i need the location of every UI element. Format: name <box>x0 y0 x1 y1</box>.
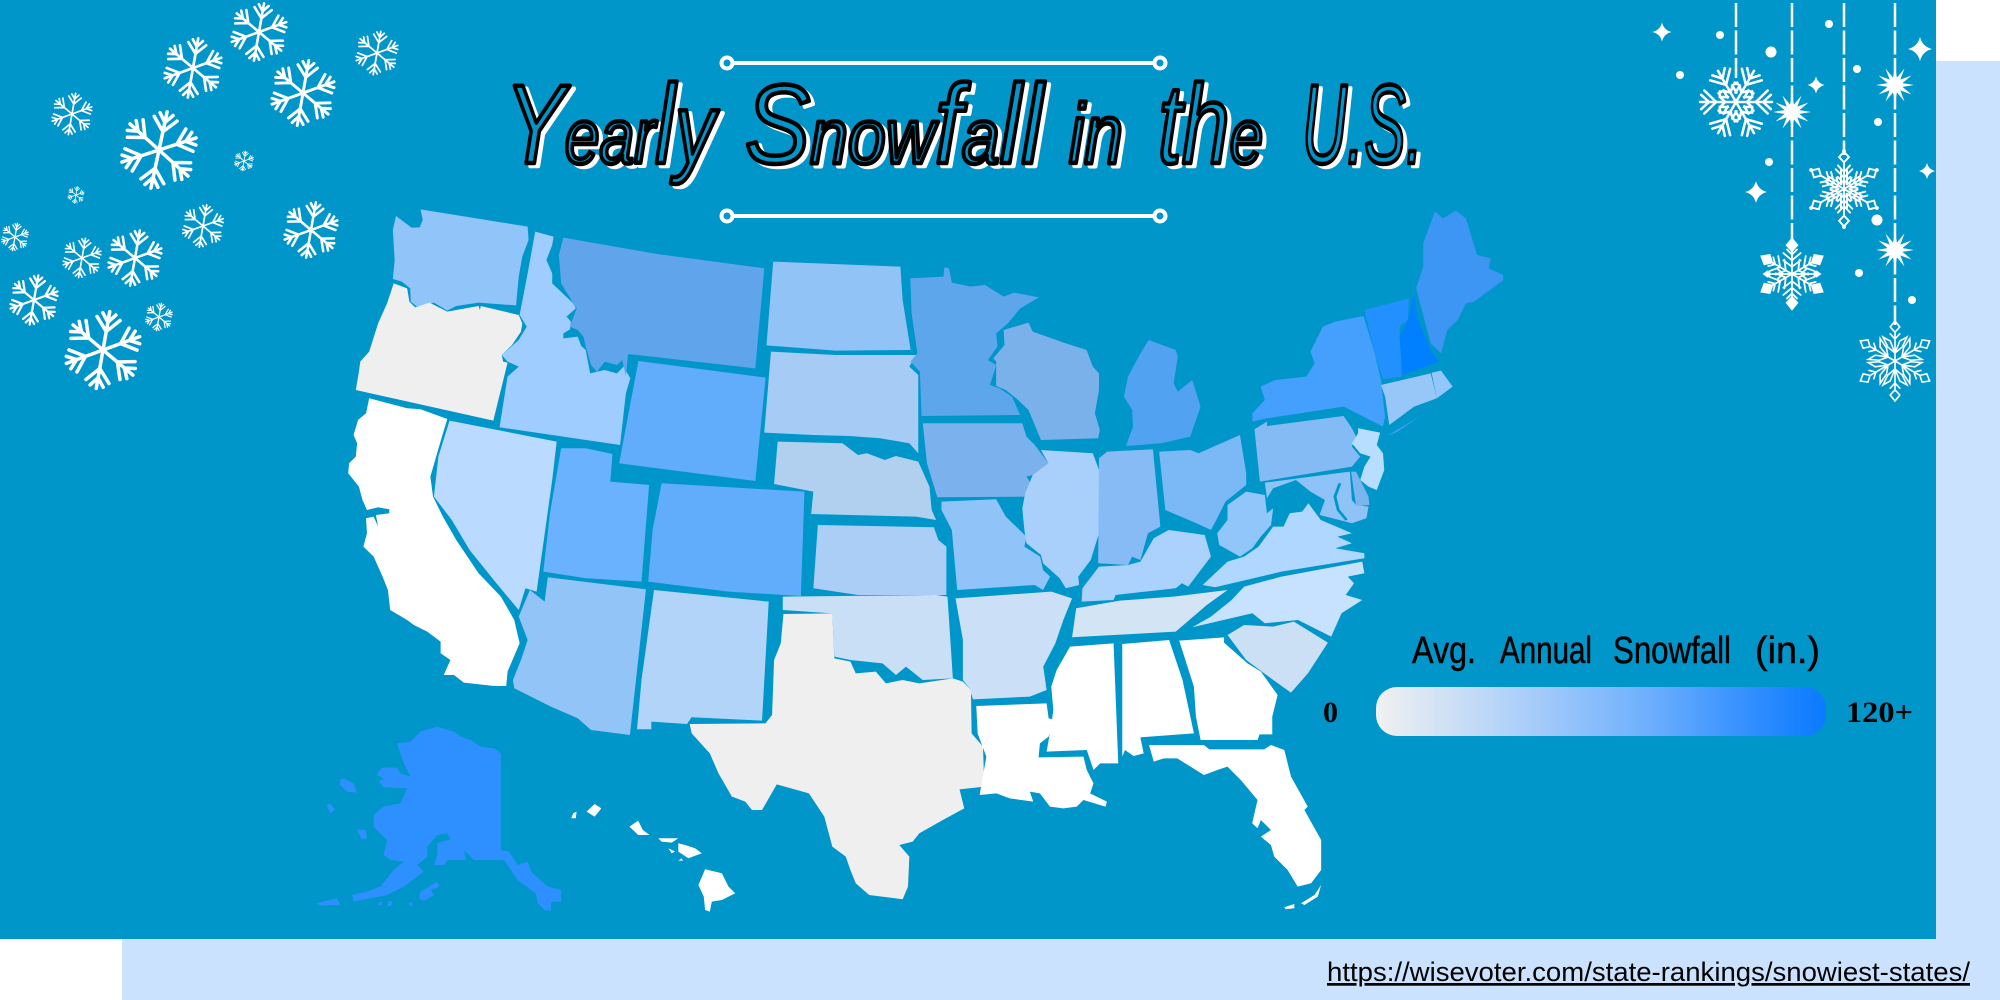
Nevada <box>434 421 557 610</box>
hanging ornaments: starbursts <box>1773 66 1914 269</box>
Wisconsin <box>993 323 1100 440</box>
hanging ornaments: snowflakes <box>1686 52 1936 401</box>
legend minimum label: 0 <box>1323 696 1338 729</box>
Alaska <box>317 727 561 911</box>
Chesapeake Bay <box>1335 483 1347 520</box>
New York <box>1252 316 1420 436</box>
New Hampshire <box>1400 294 1439 375</box>
source link: https://wisevoter.com/state-rankings/snowiest-states/ <box>1327 957 1970 987</box>
Tennessee <box>1072 590 1228 637</box>
West Virginia <box>1217 492 1273 557</box>
map: central and eastern states <box>910 211 1503 693</box>
Maine <box>1416 211 1503 353</box>
Vermont <box>1364 298 1409 379</box>
title: U.S. <box>1302 62 1423 187</box>
Wyoming <box>619 361 766 481</box>
Minnesota <box>910 267 1039 416</box>
Utah <box>543 448 649 582</box>
Washington <box>393 209 529 311</box>
Indiana <box>1098 449 1160 565</box>
hanging ornaments: strings <box>1736 3 1895 325</box>
Ohio <box>1159 435 1246 530</box>
Connecticut region <box>1381 373 1437 425</box>
Arizona <box>513 577 646 735</box>
Illinois <box>1022 450 1099 588</box>
map: southern states, Alaska and Hawaii <box>317 592 1321 912</box>
map: western states <box>348 209 946 735</box>
title <box>505 62 1423 187</box>
Massachusetts region <box>1432 371 1453 398</box>
Idaho <box>500 232 630 445</box>
title: the <box>1158 62 1263 187</box>
title: Yearly <box>505 62 720 187</box>
Hawaii <box>571 804 735 912</box>
South Dakota <box>764 352 918 453</box>
legend title: Annual <box>1500 630 1592 672</box>
Kansas <box>813 525 946 595</box>
Florida <box>1149 745 1321 909</box>
legend title <box>1412 630 1820 672</box>
left snowflake cluster <box>0 0 403 395</box>
New Mexico <box>637 590 769 729</box>
Oregon <box>356 283 522 421</box>
Colorado <box>648 483 804 596</box>
Georgia <box>1179 637 1278 740</box>
Oklahoma <box>783 595 953 680</box>
title: in <box>1069 87 1123 181</box>
New Jersey <box>1352 428 1384 490</box>
Delaware <box>1351 472 1369 506</box>
Montana <box>559 238 764 377</box>
Maryland <box>1265 472 1368 523</box>
Virginia <box>1203 503 1364 587</box>
legend title: Avg. <box>1412 630 1476 672</box>
title frame: top line <box>722 58 1166 68</box>
Louisiana <box>976 703 1107 808</box>
Mississippi <box>1047 643 1118 770</box>
legend title: (in.) <box>1755 630 1820 672</box>
legend gradient bar <box>1376 687 1826 736</box>
South Carolina <box>1228 622 1328 693</box>
legend maximum label: 120+ <box>1846 696 1913 729</box>
Arkansas <box>956 592 1072 699</box>
title: Snowfall <box>745 62 1046 187</box>
Alabama <box>1122 640 1194 757</box>
Nebraska <box>774 442 936 520</box>
California <box>348 398 520 686</box>
Pennsylvania <box>1254 416 1360 482</box>
hanging ornaments: dots <box>1676 20 1916 304</box>
Texas <box>690 613 984 899</box>
Michigan <box>1124 340 1201 446</box>
title frame: bottom line <box>722 210 1166 222</box>
Kentucky <box>1082 530 1211 602</box>
North Carolina <box>1192 562 1364 637</box>
legend title: Snowfall <box>1613 630 1731 672</box>
Missouri <box>941 499 1050 590</box>
Iowa <box>923 423 1048 497</box>
hanging ornaments: sparkles <box>1652 22 1935 203</box>
North Dakota <box>766 262 911 351</box>
